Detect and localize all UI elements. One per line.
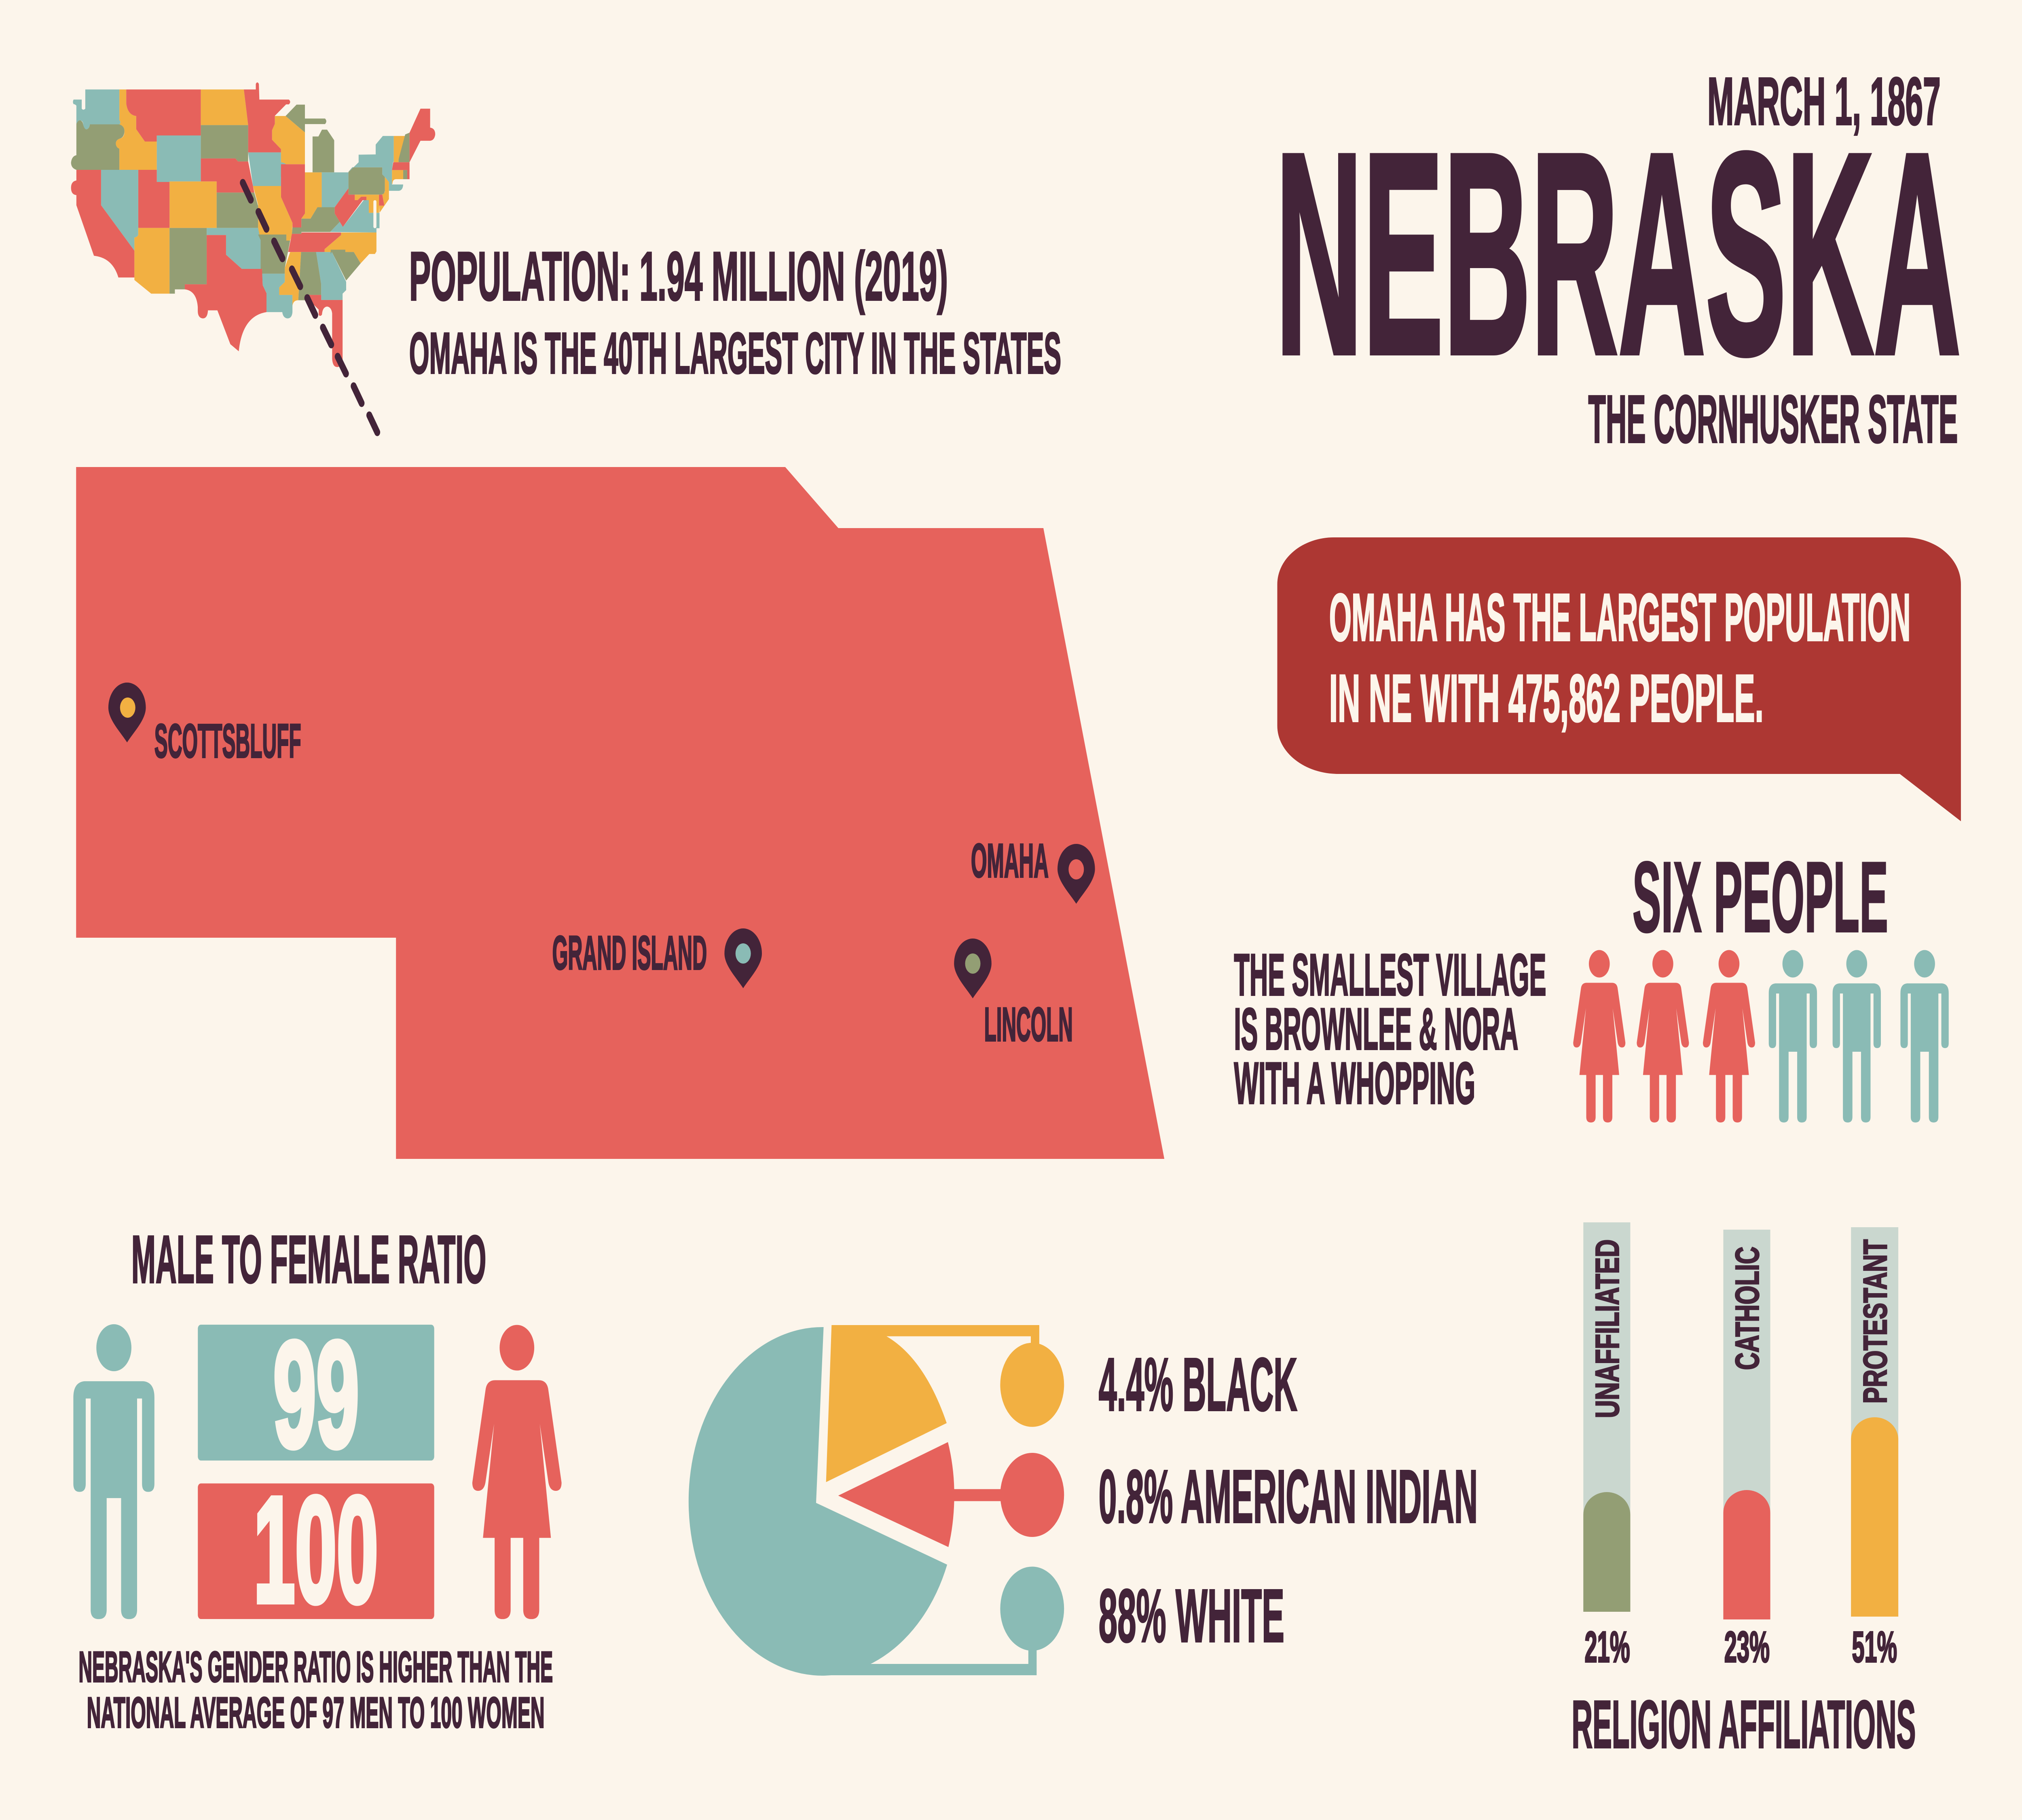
population heading: POPULATION: 1.94 MILLION (2019) — [409, 238, 948, 315]
callout text line 2: IN NE WITH 475,862 PEOPLE. — [1329, 661, 1764, 736]
pin: Scottsbluff — [108, 683, 146, 742]
red slice with connector — [838, 1442, 1064, 1547]
pin: Lincoln — [954, 939, 992, 998]
icon: large man — [73, 1324, 154, 1619]
dashed pointer line from US map to Nebraska — [243, 183, 377, 432]
teal slice with connector — [689, 1327, 1064, 1676]
US map with colored states — [71, 82, 435, 367]
pin: Grand Island — [724, 928, 762, 988]
pie chart: race demographics — [689, 1325, 1064, 1676]
bar value: 51% — [1852, 1623, 1897, 1672]
male to female ratio heading: MALE TO FEMALE RATIO — [131, 1222, 486, 1297]
smallest village text: WITH A WHOPPING — [1234, 1051, 1475, 1116]
pin: Omaha — [1058, 844, 1095, 904]
Omaha city rank text: OMAHA IS THE 40TH LARGEST CITY IN THE STATES — [409, 321, 1061, 386]
bar: unaffiliated — [1583, 1222, 1630, 1672]
smallest village text: THE SMALLEST VILLAGE — [1234, 942, 1546, 1008]
smallest village text: IS BROWNLEE & NORA — [1234, 996, 1518, 1062]
number 100: 100 — [254, 1465, 378, 1634]
yellow slice with connector — [826, 1325, 1064, 1482]
label: Lincoln: LINCOLN — [984, 998, 1073, 1051]
icon: man 2 — [1833, 950, 1881, 1122]
number 99: 99 — [273, 1310, 359, 1478]
icon: man 3 — [1900, 950, 1949, 1122]
bar label: UNAFFILIATED — [1589, 1239, 1626, 1418]
icon: woman 2 — [1637, 950, 1689, 1122]
bar value: 23% — [1724, 1623, 1770, 1672]
bar label: PROTESTANT — [1857, 1239, 1894, 1404]
bar: protestant — [1851, 1227, 1898, 1672]
gender ratio note — [78, 1643, 553, 1737]
smallest village text — [1234, 942, 1546, 1116]
male ratio box — [198, 1310, 434, 1478]
icon: woman 1 — [1573, 950, 1625, 1122]
label: Scottsbluff: SCOTTSBLUFF — [154, 714, 301, 768]
bar label: CATHOLIC — [1729, 1247, 1766, 1370]
legend: white: 88% WHITE — [1099, 1574, 1284, 1657]
bar value: 21% — [1584, 1623, 1630, 1672]
legend: american indian: 0.8% AMERICAN INDIAN — [1099, 1454, 1478, 1538]
gender ratio note: NEBRASKA'S GENDER RATIO IS HIGHER THAN THE — [78, 1643, 553, 1691]
icon: man 1 — [1769, 950, 1817, 1122]
female ratio box — [198, 1465, 434, 1634]
icon: large woman — [472, 1325, 562, 1619]
callout: Omaha population speech bubble — [1277, 537, 1961, 821]
legend: black: 4.4% BLACK — [1099, 1342, 1297, 1426]
label: Grand Island: GRAND ISLAND — [552, 926, 707, 980]
Nebraska state map — [76, 467, 1164, 1159]
icon: woman 3 — [1703, 950, 1755, 1122]
label: Omaha: OMAHA — [971, 834, 1049, 888]
gender ratio note: NATIONAL AVERAGE OF 97 MEN TO 100 WOMEN — [87, 1689, 545, 1737]
bar: catholic — [1723, 1230, 1770, 1672]
